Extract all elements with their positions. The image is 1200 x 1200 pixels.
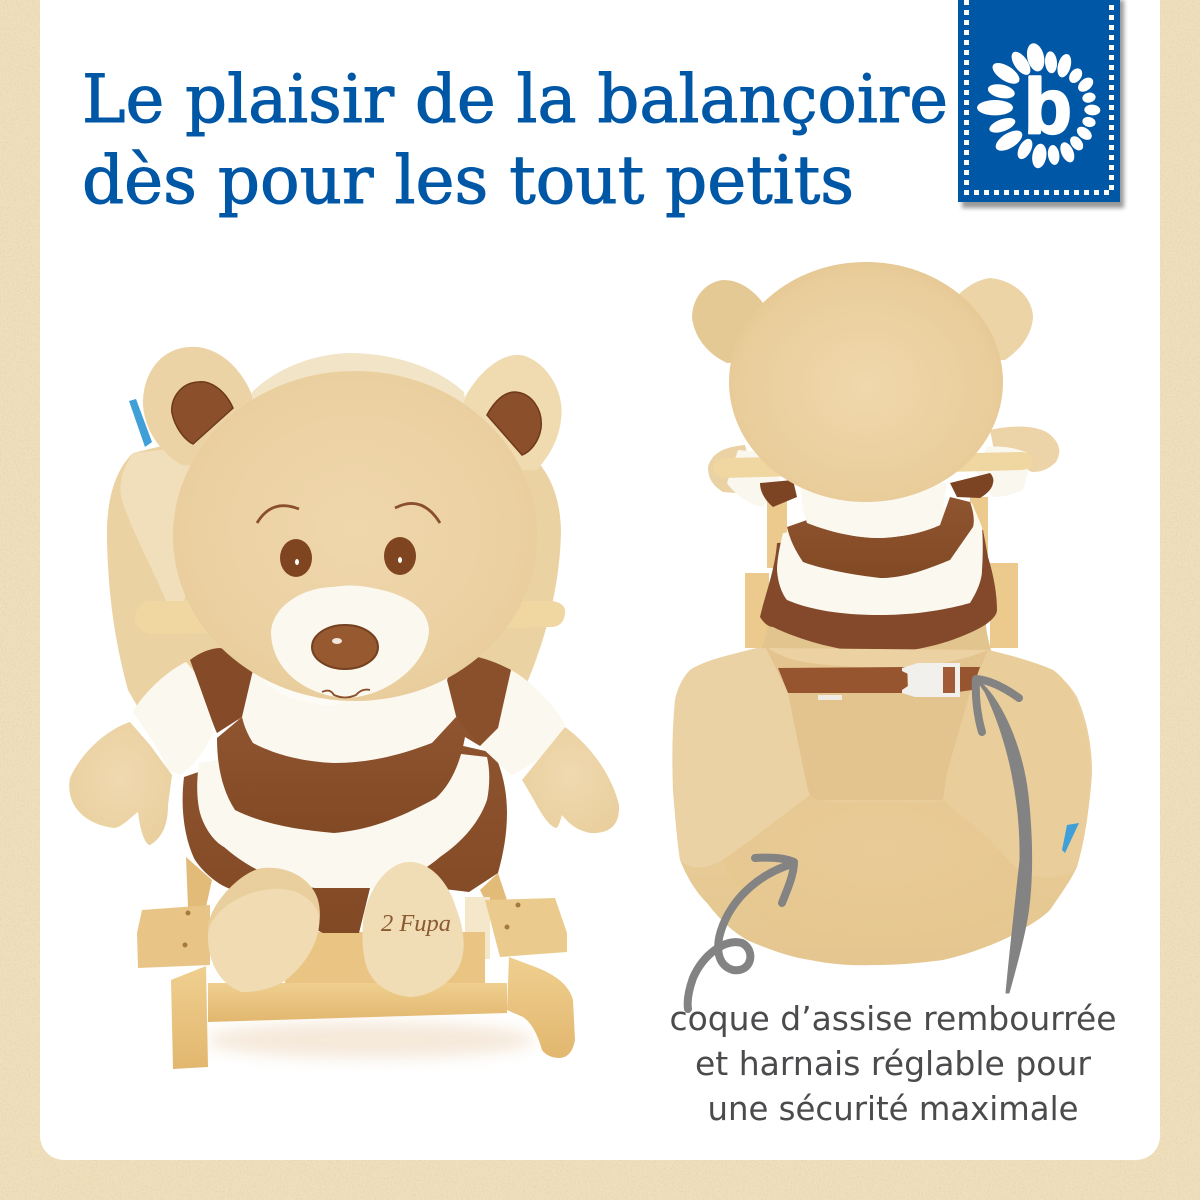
shirt chest [240,670,458,763]
back cushion [107,400,561,720]
brown lower body [183,720,507,933]
eyes [280,537,416,577]
collar [262,670,432,705]
plush neck [750,610,1000,680]
harness strap [778,667,908,693]
caption: coque d’assise rembourrée [670,999,1116,1038]
side cushions [673,648,810,868]
brown band [787,497,974,578]
caption [670,999,1116,1128]
backrest [765,646,988,800]
white lower back [777,503,983,615]
wooden frame [745,497,1018,648]
head [173,371,537,701]
handle bar [713,452,1033,478]
buckle [902,663,960,697]
ears [143,347,562,470]
ears [692,280,790,363]
head back [729,262,1003,502]
chest band [217,717,480,833]
brown shoulder straps [190,648,253,733]
title [82,61,948,219]
nose [312,625,378,698]
arms [708,445,760,495]
handle bar [135,601,565,634]
title: Le plaisir de la balançoire [82,61,948,138]
seat shell [672,648,1092,965]
title: dès pour les tout petits [82,142,854,219]
blue tag [1062,823,1079,853]
logo: blue stitched label [958,0,1124,208]
blue tag [129,399,152,447]
wooden rocker [137,857,575,1069]
arms [69,722,172,845]
shirt sleeves [133,662,213,775]
white belly [197,740,489,888]
floor shadow [205,1022,535,1058]
photo: rocking bear front view [69,347,619,1069]
sleeves [727,450,780,507]
caption: et harnais réglable pour [695,1044,1091,1083]
photo: seat back view [672,262,1092,965]
brown skirt [760,530,997,653]
brown shoulders [760,480,797,507]
signature: 2 Fupa [381,911,451,937]
legs [208,868,320,992]
arrow: harness [975,678,1032,993]
brows [257,503,440,523]
caption: une sécurité maximale [708,1089,1078,1128]
white upper back [800,483,947,538]
seat cushion [723,795,1036,945]
muzzle [271,586,429,698]
arrow: seat cushion [688,858,794,1009]
logo: blue stitched label: b [1024,62,1072,150]
